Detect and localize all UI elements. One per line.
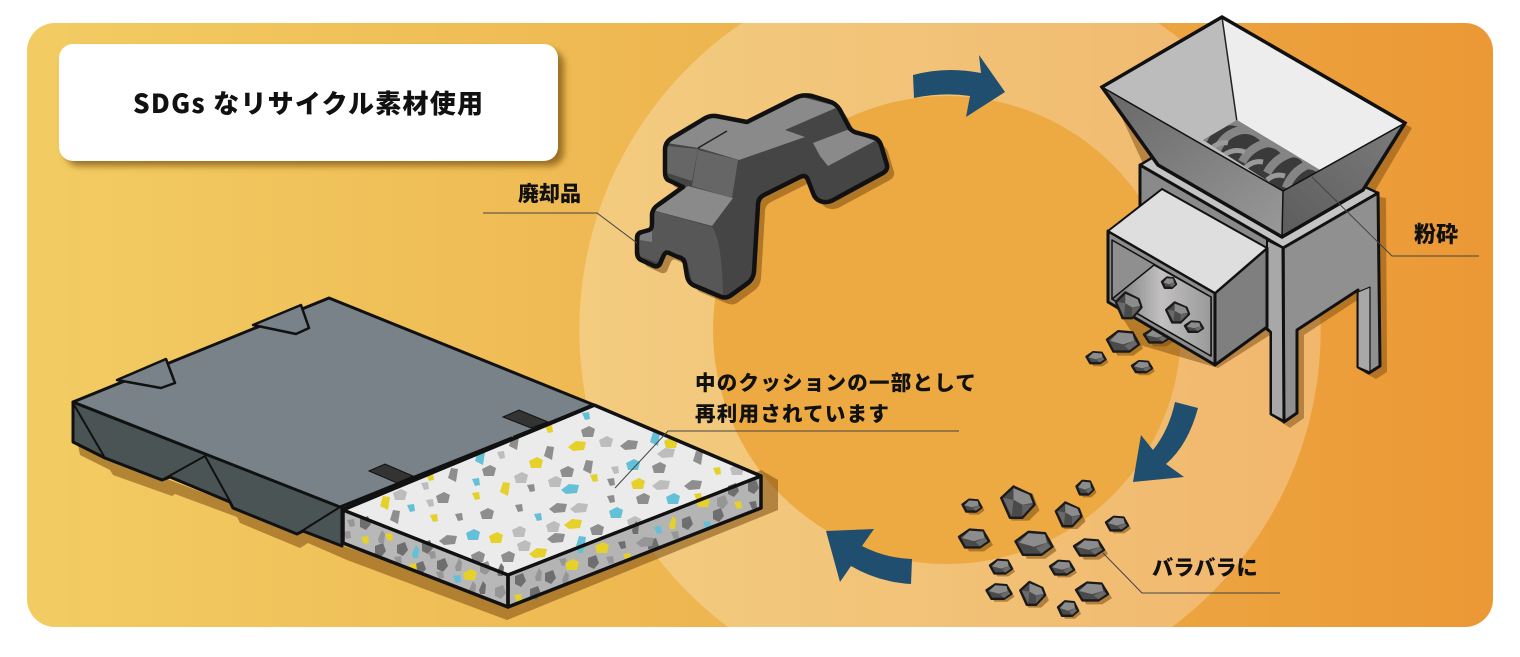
- illustration: discarded block: [637, 95, 894, 304]
- cover top: [73, 298, 594, 507]
- label: broken apart: バラバラに: [1152, 551, 1258, 582]
- label: crushing: 粉砕: [1414, 217, 1458, 249]
- arrow: rocks to mat: [826, 529, 912, 584]
- frame: [1140, 153, 1380, 422]
- label: reuse in cushion: 再利用されています: [695, 397, 890, 427]
- arrow: shredder to rocks: [1133, 402, 1198, 482]
- illustration: recycled mat: [73, 298, 778, 620]
- foam chips side: [360, 480, 759, 600]
- label: broken apart: [1103, 551, 1280, 593]
- foam chips top: [380, 425, 721, 558]
- cover straps: [369, 410, 548, 483]
- illustration: shredder machine: [1102, 17, 1412, 428]
- shredding screws: [1203, 120, 1322, 191]
- cover side: [73, 402, 342, 546]
- chute: [1108, 189, 1267, 365]
- falling rocks near chute: [1086, 331, 1155, 375]
- chute rocks: [1162, 278, 1176, 288]
- label: discarded product: [483, 178, 637, 243]
- label: reuse in cushion: [615, 366, 977, 488]
- foam outline: [342, 405, 761, 607]
- label: reuse in cushion: 中のクッションの一部として: [695, 366, 977, 396]
- cover tabs: [117, 305, 309, 388]
- label: crushing: [1312, 177, 1479, 256]
- machine shadow: [1110, 22, 1412, 428]
- label: discarded product: 廃却品: [518, 178, 581, 208]
- illustration: crushed rocks: [959, 481, 1131, 619]
- arrow: block to shredder: [913, 55, 1005, 117]
- hopper inside: [1102, 17, 1283, 191]
- mat shadow: [78, 445, 778, 620]
- hopper front faces: [1102, 87, 1283, 237]
- foam faces: [343, 510, 508, 607]
- title card: [59, 44, 564, 166]
- spilled rock under chute: [1148, 333, 1174, 346]
- title card: SDGs なリサイクル素材使用: [133, 84, 484, 121]
